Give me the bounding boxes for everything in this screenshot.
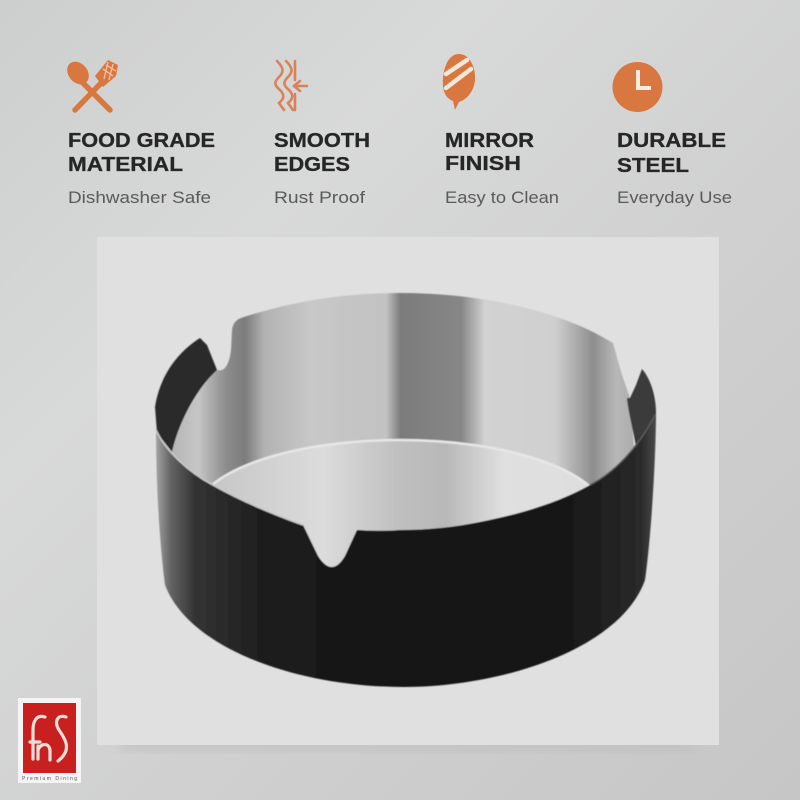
- heading: smooth edges: SMOOTH: [274, 130, 370, 152]
- logo: fnS premium dining: [18, 698, 81, 783]
- logo tagline: Premium Dining: [22, 776, 77, 782]
- heading: mirror finish: MIRROR: [445, 130, 535, 152]
- feature: smooth edges: EDGES: [274, 154, 350, 176]
- heading: durable steel: DURABLE: [617, 130, 726, 152]
- panel: product photo backdrop: [97, 237, 719, 745]
- inner left wall shadow: [155, 338, 217, 452]
- feature: durable steel: [612, 62, 732, 207]
- inner wall: [165, 293, 640, 520]
- rim highlight: [156, 430, 303, 525]
- icon: wavy edge with arrow: [275, 61, 307, 110]
- icon: crossed spoon and fork: [63, 57, 118, 110]
- feature: food grade material: MATERIAL: [68, 154, 183, 176]
- subtext: everyday use: Everyday Use: [617, 188, 732, 207]
- feature: food grade material: [63, 57, 215, 207]
- outer body: [156, 413, 656, 687]
- feature: mirror finish: [443, 54, 559, 207]
- feature: mirror finish: FINISH: [445, 153, 521, 175]
- subtext: rust proof: Rust Proof: [274, 188, 365, 207]
- icon: striped polished spoon: [443, 54, 475, 110]
- product: black steel ashtray: [155, 293, 656, 687]
- floor of tray: [195, 440, 605, 590]
- heading: food grade material: FOOD GRADE: [68, 130, 215, 152]
- logo letters: [30, 716, 66, 761]
- feature: durable steel: STEEL: [617, 155, 689, 177]
- panel shadow: [120, 741, 696, 749]
- subtext: dishwasher safe: Dishwasher Safe: [68, 188, 211, 207]
- inner right wall shadow: [627, 369, 656, 446]
- feature: smooth edges: [274, 61, 370, 207]
- icon: clock: [612, 62, 662, 112]
- subtext: easy to clean: Easy to Clean: [445, 188, 559, 207]
